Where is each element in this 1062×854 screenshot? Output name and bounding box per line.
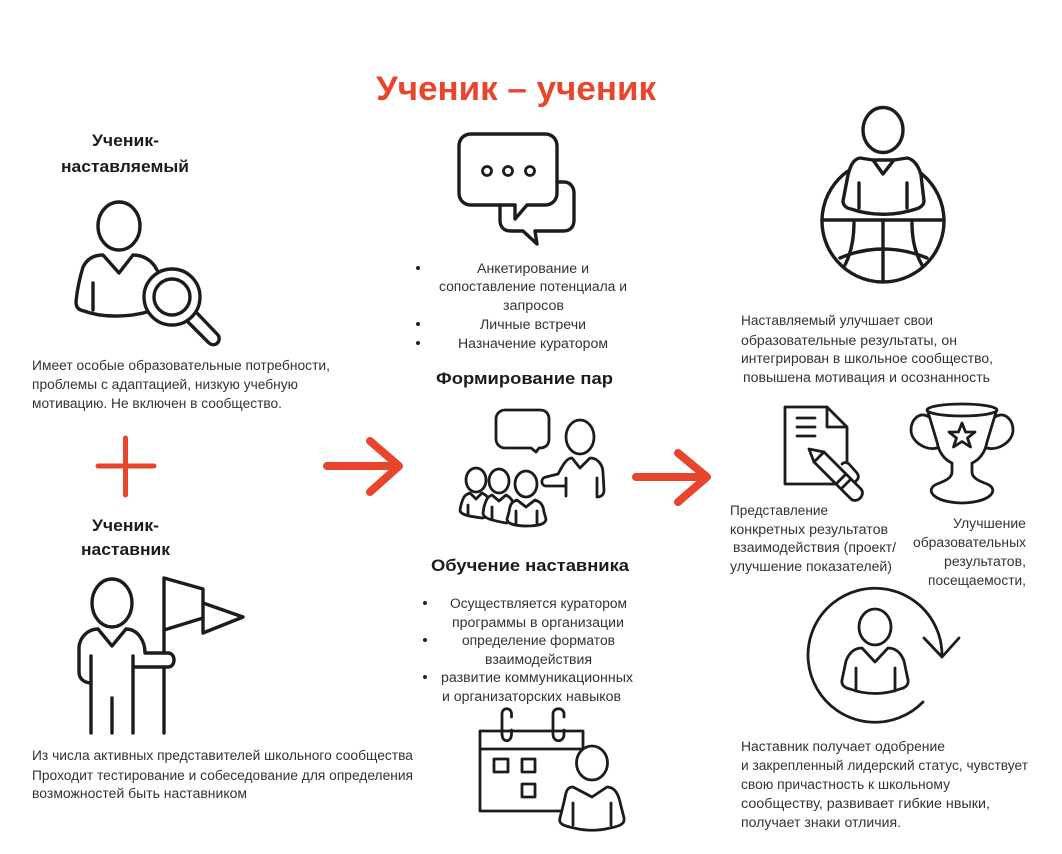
icon: presenter and audience <box>460 410 604 526</box>
text: mentor description: возможностей быть наставником <box>32 786 247 801</box>
text: mentee result <box>741 313 993 385</box>
panel: results <box>730 108 1028 830</box>
icon: person with flag <box>79 578 243 733</box>
text: mentor result: сообществу, развивает гибкие нвыки, <box>741 796 990 811</box>
icon: person in cycle arrow <box>808 588 959 722</box>
text: mentor result <box>741 739 1028 830</box>
text: concrete results: улучшение показателей) <box>730 559 892 574</box>
icon: calendar with person <box>480 709 624 830</box>
list: mentor training steps: программы в организации <box>452 615 624 630</box>
text: mentee result: интегрирован в школьное сообщество, <box>741 351 993 366</box>
text: concrete results <box>730 503 896 574</box>
text: improved attainment <box>913 516 1026 588</box>
arrow: process to results <box>636 453 707 502</box>
text: mentor result: Наставник получает одобрение <box>741 739 945 754</box>
text: mentor description: Из числа активных представителей школьного сообщества <box>32 748 413 763</box>
text: mentee result: повышена мотивация и осознанность <box>743 370 990 385</box>
heading: mentor training: Обучение наставника <box>431 557 630 575</box>
text: improved attainment: результатов, <box>944 554 1026 569</box>
list: pair formation steps: Личные встречи <box>480 317 586 332</box>
heading: mentee <box>61 132 189 176</box>
text: mentee description: проблемы с адаптацией, низкую учебную <box>32 377 298 392</box>
heading: mentor <box>81 517 171 559</box>
heading: mentee: Ученик- <box>92 132 159 150</box>
text: improved attainment: Улучшение <box>953 516 1026 531</box>
text: mentee description: Имеет особые образовательные потребности, <box>32 358 330 373</box>
list: mentor training steps: Осуществляется куратором <box>450 596 627 611</box>
text: concrete results: Представление <box>730 503 828 518</box>
list: pair formation steps: запросов <box>503 298 564 313</box>
icon: document with pen <box>785 407 862 500</box>
icon: trophy with star <box>911 404 1013 503</box>
heading: pair formation: Формирование пар <box>436 370 613 388</box>
text: mentor result: свою причастность к школьному <box>741 777 950 792</box>
text: mentee description: мотивацию. Не включен в сообщество. <box>32 396 282 411</box>
list: pair formation steps: сопоставление потенциала и <box>439 279 627 294</box>
list: mentor training steps <box>423 596 633 704</box>
text: mentor result: получает знаки отличия. <box>741 815 901 830</box>
list: pair formation steps: Назначение куратором <box>458 336 608 351</box>
text: mentee description <box>32 358 330 411</box>
text: concrete results: взаимодействия (проект/ <box>733 540 896 555</box>
heading: mentee: наставляемый <box>61 158 189 176</box>
list: mentor training steps: взаимодействия <box>485 652 592 667</box>
icon: person with magnifier <box>76 202 219 345</box>
text: mentor description: Проходит тестирование и собеседование для определения <box>32 768 413 783</box>
icon: speech bubbles <box>459 134 574 244</box>
list: mentor training steps: развитие коммуникационных <box>441 670 633 685</box>
list: pair formation steps: Анкетирование и <box>477 261 589 276</box>
title: Ученик – ученик <box>376 70 657 108</box>
panel: participants <box>32 132 413 801</box>
icon: person over globe <box>822 108 944 282</box>
text: mentee result: Наставляемый улучшает свои <box>741 313 933 328</box>
text: mentor description <box>32 748 413 801</box>
arrow: participants to process <box>327 441 399 492</box>
text: mentor result: и закрепленный лидерский статус, чувствует <box>741 758 1028 773</box>
heading: mentor: наставник <box>81 541 171 559</box>
list: mentor training steps: определение форматов <box>462 633 615 648</box>
text: concrete results: конкретных результатов <box>730 522 888 537</box>
text: improved attainment: посещаемости, <box>928 573 1026 588</box>
list: pair formation steps <box>416 261 627 351</box>
heading: mentor: Ученик- <box>92 517 159 535</box>
panel: process <box>416 134 633 830</box>
text: improved attainment: образовательных <box>913 535 1026 550</box>
text: mentee result: образовательные результаты, он <box>741 333 957 348</box>
icon: red plus <box>98 438 154 495</box>
list: mentor training steps: и организаторских навыков <box>442 689 621 704</box>
